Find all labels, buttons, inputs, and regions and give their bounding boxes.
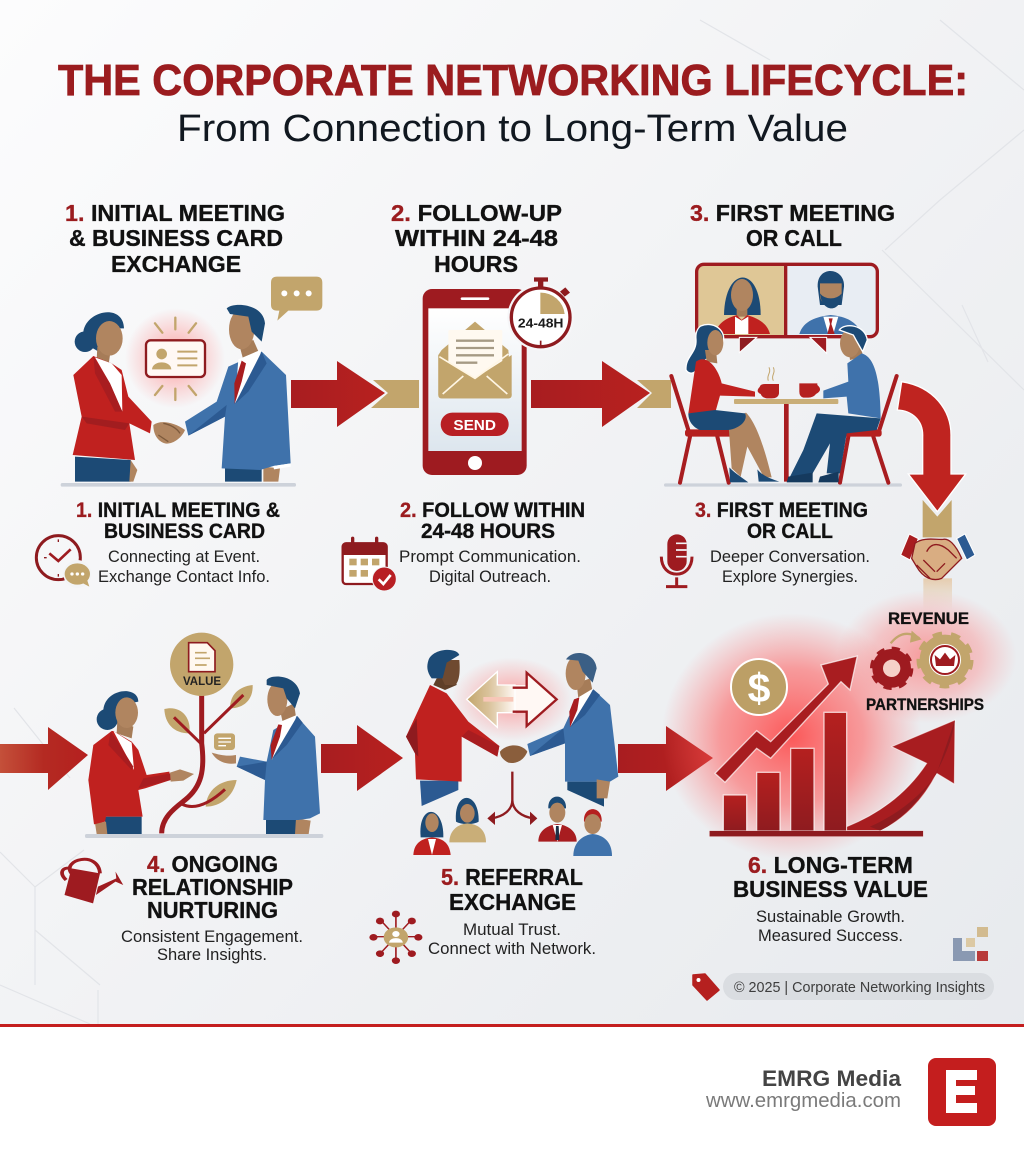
arrow: step 2 to 3 [531,361,671,427]
text: step 4 description: Share Insights. [157,946,267,964]
text: step 6 description: Measured Success. [758,927,903,945]
text: step 4 description: Consistent Engagement. [121,928,303,946]
heading: step 3 top [690,200,895,251]
footer website: www.emrgmedia.com [705,1090,901,1112]
arrow: step 1 to 2 [291,361,419,427]
subheading: step 1 [76,498,280,543]
panel: step 1 initial meeting [36,200,419,588]
chart: glowing growth bars and arrows [662,590,1017,860]
heading: step 6: BUSINESS VALUE [733,876,928,902]
subheading: step 3 [695,498,868,543]
text: step 4 description [121,928,303,964]
panel: step 5 referral exchange [369,650,713,964]
icon: gears with revenue and partnerships labels [866,609,984,714]
illustration: phone, envelope and stopwatch: 24-48H [518,315,563,330]
text: step 1 description: Exchange Contact Info. [98,568,270,586]
footer brand name: EMRG Media [762,1066,901,1091]
icon: dollar coin: $ [748,665,771,711]
subheading: step 1: 1. INITIAL MEETING & [76,498,280,522]
heading: step 2 top: 2. FOLLOW-UP [391,200,562,226]
text: step 5 description [428,921,596,958]
copyright pill [723,973,994,1000]
subheading: step 2 [400,498,585,543]
icon: microphone [661,534,692,587]
heading: step 1 top: EXCHANGE [111,251,241,277]
text: step 6 description [756,908,905,945]
title: THE CORPORATE NETWORKING LIFECYCLE: [58,56,968,105]
heading: step 6: 6. LONG-TERM [748,852,913,878]
icon: clock with chat bubble [36,536,91,588]
panel: step 4 relationship nurturing [0,633,403,964]
text: step 3 description: Deeper Conversation. [710,548,870,566]
text: step 2 description: Digital Outreach. [429,568,551,586]
heading: step 2 top [391,200,562,277]
icon: calendar with check [343,538,396,591]
icon: gears with revenue and partnerships labels: REVENUE [888,609,969,628]
panel: step 2 follow-up [343,200,671,591]
heading: step 4: RELATIONSHIP [132,874,293,900]
heading: step 1 top: 1. INITIAL MEETING [65,200,285,226]
copyright pill: © 2025 | Corporate Networking Insights [734,980,985,996]
footer band [0,1024,1024,1154]
heading: step 3 top: OR CALL [746,225,842,251]
text: step 2 description [399,548,581,586]
illustration: phone, envelope and stopwatch: SEND [453,417,496,434]
subheading: step 3: 3. FIRST MEETING [695,498,868,522]
illustration: nurturing plant and two professionals [85,633,323,838]
text: step 3 description: Explore Synergies. [722,568,858,586]
illustration: video call and cafe meeting [664,264,966,512]
icon: dollar coin [731,659,787,715]
text: step 1 description: Connecting at Event. [108,548,260,566]
text: step 6 description: Sustainable Growth. [756,908,905,926]
heading: step 4: NURTURING [147,897,278,923]
heading: step 3 top: 3. FIRST MEETING [690,200,895,226]
logo: E badge [928,1058,996,1126]
heading: step 2 top: HOURS [434,251,518,277]
heading: step 1 top [65,200,285,277]
text: step 5 description: Connect with Network. [428,940,596,958]
illustration: phone, envelope and stopwatch [423,277,574,475]
arrow: step 5 to 6 [618,726,713,791]
title: From Connection to Long-Term Value [177,108,848,150]
arrow: step 4 to 5 [321,725,403,791]
subheading: step 3: OR CALL [747,519,833,543]
panel: step 6 long-term value [662,590,1017,1000]
text: step 5 description: Mutual Trust. [463,921,561,939]
text: step 1 description [98,548,270,586]
illustration: nurturing plant and two professionals: VALUE [183,674,221,688]
heading: step 5: 5. REFERRAL [441,864,583,890]
heading: step 5: EXCHANGE [449,889,576,915]
subheading: step 1: BUSINESS CARD [104,519,265,543]
illustration: referral handshake and network people [406,650,618,856]
heading: step 2 top: WITHIN 24-48 [395,225,558,251]
heading: step 4 [132,851,293,923]
panel: step 3 first meeting [661,200,975,610]
subheading: step 2: 2. FOLLOW WITHIN [400,498,585,522]
text: step 3 description [710,548,870,586]
icon: network hub [369,911,422,964]
title [58,56,968,150]
subheading: step 2: 24-48 HOURS [421,519,555,543]
illustration: handshake and business card [61,277,322,487]
heading: step 4: 4. ONGOING [147,851,278,877]
icon: price tag [693,974,719,1000]
connector: tan arrow tail and handshake [901,500,975,610]
heading: step 1 top: & BUSINESS CARD [69,225,283,251]
icon: decorative mini squares [953,927,988,961]
arrow: into step 4 [0,727,88,790]
icon: watering can [62,859,123,903]
heading: step 6 [733,852,928,902]
heading: step 5 [441,864,583,915]
text: step 2 description: Prompt Communication. [399,548,581,566]
icon: gears with revenue and partnerships labels: PARTNERSHIPS [866,695,984,714]
